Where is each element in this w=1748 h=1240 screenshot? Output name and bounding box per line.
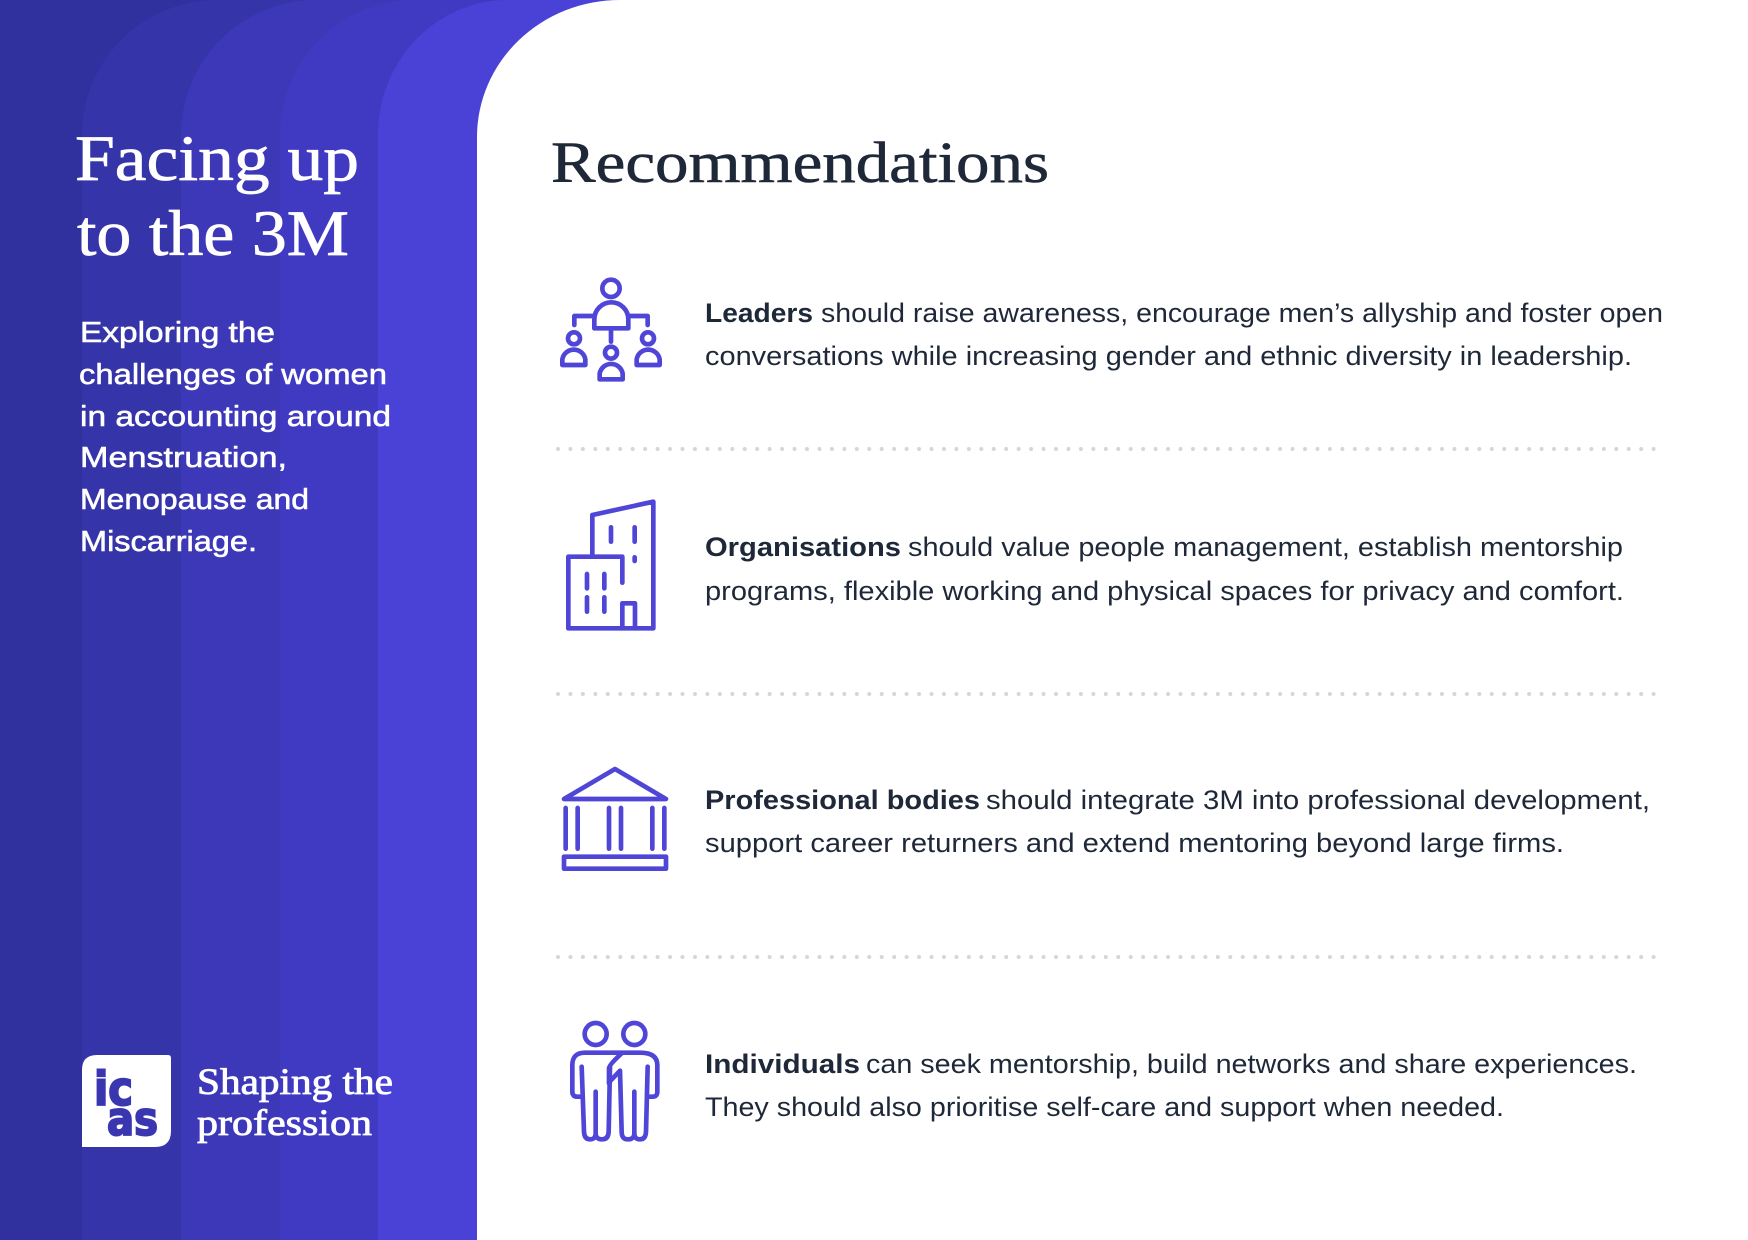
recommendation: organisations: should value people management, establish mentorship (908, 532, 1623, 562)
recommendation: individuals: can seek mentorship, build networks and share experiences. (866, 1049, 1637, 1079)
recommendation: professional bodies: should integrate 3M into professional development, (986, 785, 1650, 815)
icas logo (82, 1055, 171, 1147)
recommendation: individuals: Individuals (705, 1049, 860, 1079)
icas logo: as (107, 1092, 158, 1146)
subtitle text block: in accounting around (80, 401, 391, 433)
recommendation: individuals: They should also prioritise self-care and support when needed. (705, 1092, 1504, 1122)
subtitle text block (79, 317, 391, 558)
title: Facing up (75, 123, 359, 195)
subtitle text block: challenges of women (79, 359, 387, 391)
title (75, 123, 359, 270)
icas logo: ic (94, 1062, 133, 1116)
tagline: profession (197, 1103, 372, 1144)
recommendation: leaders: should raise awareness, encourage men’s allyship and foster open (821, 298, 1663, 328)
tagline: Shaping the (197, 1062, 393, 1103)
recommendation: professional bodies: support career returners and extend mentoring beyond large firms. (705, 828, 1564, 858)
subtitle text block: Exploring the (80, 317, 275, 349)
recommendation: leaders: conversations while increasing gender and ethnic diversity in leadership. (705, 341, 1632, 371)
subtitle text block: Menopause and (80, 484, 309, 516)
recommendation: professional bodies: Professional bodies (705, 785, 980, 815)
icon: organisation buildings (568, 502, 653, 628)
subtitle text block: Miscarriage. (80, 526, 257, 558)
recommendation: organisations: Organisations (705, 532, 901, 562)
recommendation: organisations: programs, flexible working and physical spaces for privacy and comfort. (705, 576, 1624, 606)
icon: professional body temple (564, 769, 666, 869)
icon: leaders hierarchy (562, 280, 660, 379)
tagline (197, 1062, 393, 1144)
recommendation: individuals (705, 1049, 1637, 1122)
recommendation: leaders (705, 298, 1663, 371)
recommendation: organisations (705, 532, 1624, 606)
icon: two individuals (572, 1023, 657, 1139)
recommendation: leaders: Leaders (705, 298, 813, 328)
subtitle text block: Menstruation, (80, 442, 287, 474)
heading: Recommendations: Recommendations (551, 130, 1049, 195)
recommendation: professional bodies (705, 785, 1650, 858)
title: to the 3M (77, 198, 349, 270)
